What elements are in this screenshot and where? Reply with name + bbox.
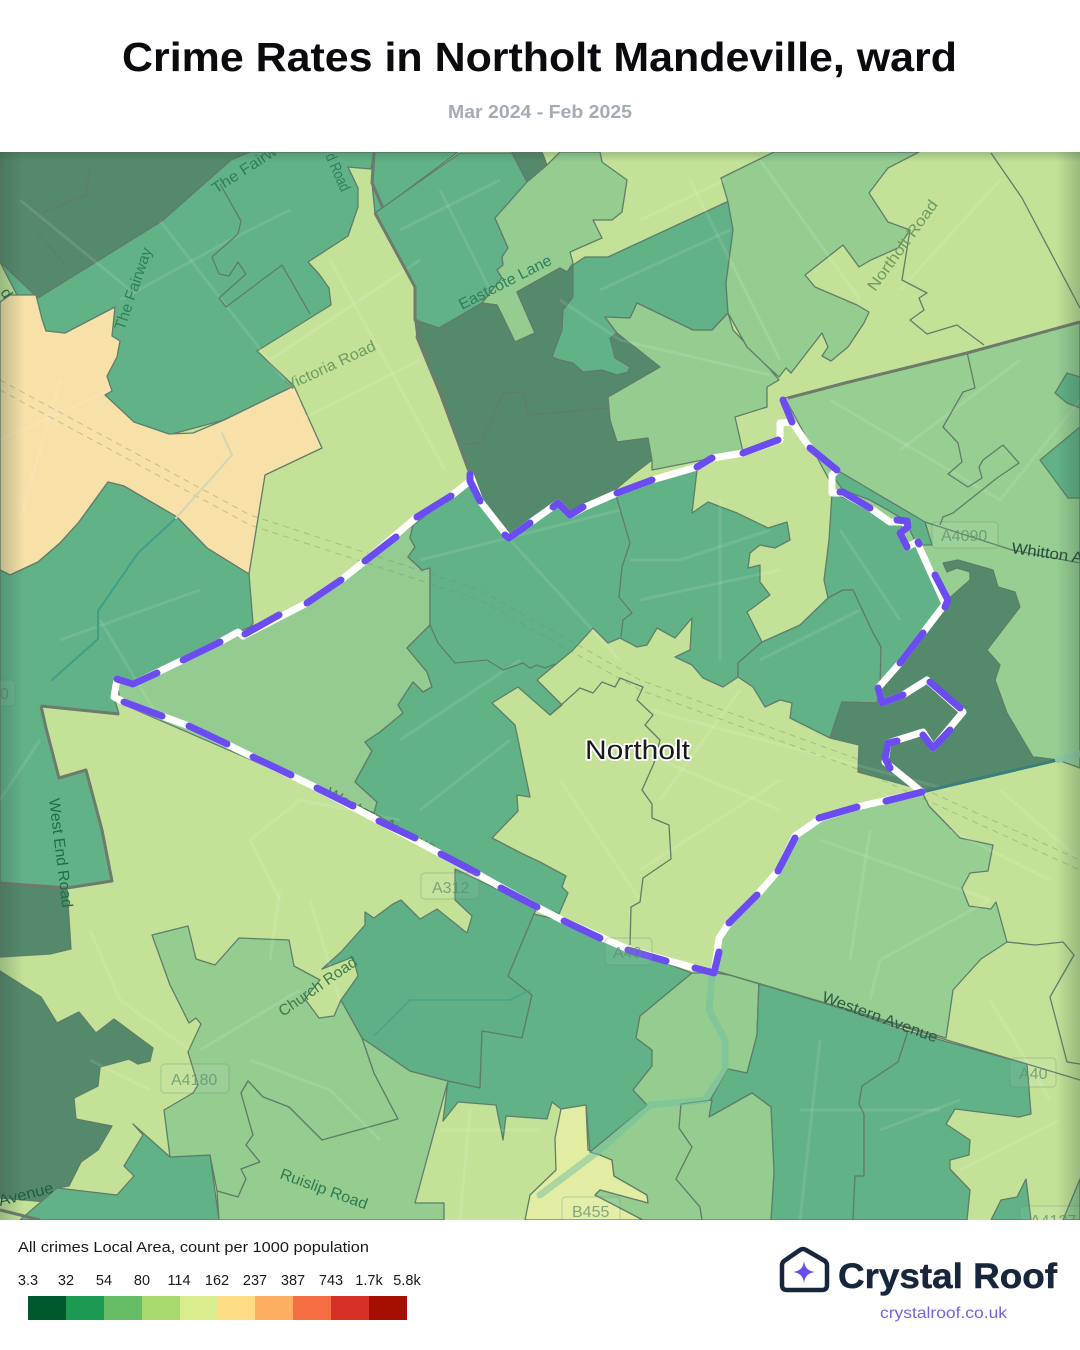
- area: cream higher-rate area: [0, 295, 322, 575]
- area: top light green with Eastcote strip: [482, 152, 627, 342]
- road shield: A40 east: A40: [1019, 1066, 1048, 1083]
- legend value labels: 3.3: [18, 1273, 38, 1289]
- legend value labels: 387: [281, 1273, 305, 1289]
- website url: crystalroof.co.uk: [880, 1305, 1008, 1322]
- road label: Ruislip Road: Ruislip Road: [278, 1166, 370, 1213]
- road label: The Fairway: The Fairway: [112, 245, 156, 332]
- area: north-west dark: [0, 152, 250, 298]
- ward dashes purple: [117, 400, 960, 973]
- area: south Ruislip light green: [217, 1038, 448, 1220]
- area: top dark sliver: [512, 152, 547, 182]
- area: Ruislip Road light green: [152, 926, 398, 1197]
- area: north light green one: [605, 303, 779, 470]
- road shield: A4090: A4090: [941, 528, 987, 545]
- road label: Road top: d Road: [321, 151, 353, 194]
- title: Crime Rates in Northolt Mandeville, ward: [122, 34, 957, 80]
- area: west dark block: [0, 883, 71, 957]
- area: north mid green block: [552, 200, 733, 375]
- legend value labels: 80: [134, 1273, 150, 1289]
- area: Eastcote Lane mid green: [375, 153, 527, 328]
- legend value labels: 162: [205, 1273, 229, 1289]
- area: corner mid green: [991, 1179, 1031, 1220]
- area: south-west dark: [0, 971, 153, 1203]
- area: Church Road mid green: [322, 869, 537, 1088]
- area: east mid green patch two: [1040, 427, 1080, 498]
- road label: The Fairway top: The Fairw: [209, 142, 281, 197]
- river: brook south: [375, 990, 530, 1035]
- road shield: B455: B455: [572, 1204, 609, 1221]
- area: south light green strip: [676, 1093, 774, 1220]
- canal: teal edge: [922, 760, 1058, 792]
- area: north mid green small: [372, 152, 458, 213]
- waterways: [52, 433, 1080, 1195]
- area: south-east mid green two: [853, 1031, 1031, 1220]
- area: corner light green: [1063, 1179, 1080, 1220]
- legend value labels: 114: [167, 1273, 191, 1289]
- area: north dark block: [415, 265, 660, 538]
- road shield: A4180: A4180: [171, 1072, 217, 1089]
- icon: house with star: [782, 1249, 827, 1290]
- area: ward south-east mid green: [738, 590, 881, 738]
- road label: West End Road: West End Road: [45, 797, 75, 909]
- road label: Northolt Road: Northolt Road: [864, 197, 942, 294]
- road shield: A312: [421, 873, 479, 899]
- road shield: A4090: [932, 522, 998, 548]
- logo: Crystal Roof: [782, 1249, 1057, 1322]
- road shield: A4180: [161, 1064, 229, 1093]
- area: pale yellow patch: [525, 1105, 648, 1220]
- river: west brook: [52, 518, 176, 680]
- legend: [18, 1239, 421, 1320]
- road shield: A40 centre: A40: [613, 945, 642, 962]
- area: east mid green patch one: [1055, 373, 1080, 408]
- legend value labels: 743: [319, 1273, 343, 1289]
- area: ward central mid green: [355, 470, 790, 914]
- brand name: Crystal Roof: [838, 1257, 1057, 1296]
- road label: Victoria Road: Victoria Road: [283, 338, 379, 395]
- legend title: All crimes Local Area, count per 1000 population: [18, 1239, 369, 1256]
- area: ward edge wedge: [832, 470, 932, 545]
- legend value labels: [18, 1273, 421, 1289]
- legend value labels: 1.7k: [355, 1273, 383, 1289]
- railway lines: [0, 380, 1080, 870]
- path: grey line by cream area: [176, 433, 232, 518]
- legend value labels: 5.8k: [393, 1273, 421, 1289]
- road label: Church Road: Church Road: [276, 954, 361, 1020]
- area: south-west mid green: [20, 1124, 219, 1220]
- legend colour scale: [28, 1296, 407, 1320]
- road label: Whitton Avenue: Whitton A: [1010, 540, 1080, 567]
- road shield: A4127: [1020, 1206, 1080, 1232]
- area: north-west mid green: [0, 152, 374, 440]
- map edge vignette: [0, 152, 1080, 1220]
- legend value labels: 54: [96, 1273, 112, 1289]
- area: ward east mid green: [824, 493, 945, 688]
- subtitle: date range: Mar 2024 - Feb 2025: [448, 102, 632, 122]
- road shield: A4127: A4127: [1030, 1213, 1076, 1230]
- map base: lower rate yellow-green areas: [0, 152, 1080, 1220]
- thin unfilled boundaries: [34, 153, 1080, 1080]
- area: north light green two: [721, 152, 919, 377]
- road shield: west edge: [0, 680, 15, 706]
- river: central stream: [540, 975, 725, 1195]
- area: south-east mid green one: [709, 980, 908, 1220]
- area: ward central-west light green: [117, 525, 432, 813]
- road shield: A40 east: [1010, 1058, 1056, 1087]
- place label: Northolt: Northolt: [585, 735, 691, 765]
- road shield: west edge: 0: [0, 686, 9, 703]
- road network overlay: [0, 160, 1080, 1220]
- canal: pale continuation: [1058, 754, 1080, 760]
- legend value labels: 237: [243, 1273, 267, 1289]
- map areas: [0, 152, 1080, 1220]
- road shield: A40 centre: [605, 938, 652, 965]
- area: south central mid green: [443, 914, 692, 1152]
- area: east light green: [785, 322, 1080, 792]
- area: south-east light green: [716, 792, 1007, 1038]
- road shield: A312: A312: [432, 880, 469, 897]
- road label: Western Avenue ward: Western Avenue: [323, 785, 439, 857]
- area: east dark block: [830, 560, 1058, 790]
- legend value labels: 32: [58, 1273, 74, 1289]
- area: west mid green: [0, 482, 253, 888]
- area: south central light green: [590, 973, 759, 1220]
- road label: Western Avenue: Western Avenue: [820, 989, 940, 1046]
- ward boundary: Northolt Mandeville: [114, 400, 963, 973]
- road label: Eastcote Lane: Eastcote Lane: [456, 252, 555, 314]
- ward outline white: [114, 400, 963, 973]
- road shield: B455: [562, 1197, 620, 1225]
- strong district boundaries: [0, 152, 1080, 1220]
